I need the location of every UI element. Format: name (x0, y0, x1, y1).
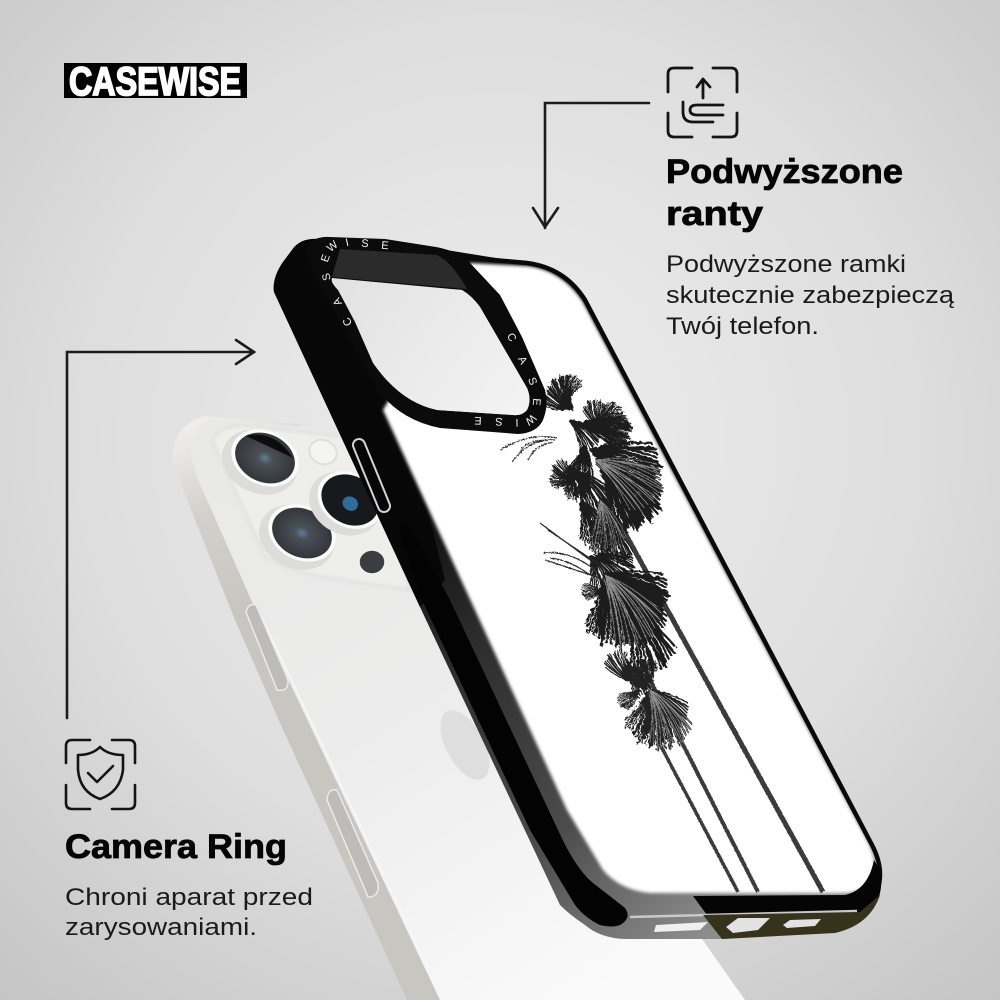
ring lettering right: W (522, 411, 538, 428)
side slot (398, 524, 628, 926)
lens bottom (248, 491, 346, 582)
ring lettering right: E (530, 398, 542, 406)
phone back (190, 418, 745, 1000)
flash (305, 435, 341, 469)
white phone (172, 416, 745, 1000)
bottom light line (630, 911, 857, 917)
camera ring (307, 237, 547, 434)
ring lettering left: I (344, 237, 350, 249)
camera plateau (212, 425, 410, 590)
usb hole (726, 918, 770, 933)
trunks (615, 515, 823, 892)
ring hole (332, 278, 530, 415)
ring lettering left: A (331, 295, 345, 308)
fine fronds two (540, 523, 600, 578)
phone side band (172, 416, 470, 1000)
palm trees (500, 370, 823, 892)
apple logo (430, 703, 500, 787)
ring lettering left: S (320, 272, 334, 282)
side button (327, 790, 378, 897)
icon: raised edges (668, 68, 737, 137)
bottom olive edge (703, 895, 880, 939)
upper side button (246, 605, 288, 690)
sensor (359, 550, 385, 574)
heading: raised edges: ranty (666, 195, 763, 233)
mic hole (783, 919, 821, 928)
ring lettering right: A (515, 354, 529, 367)
ring inner wall (332, 249, 467, 289)
fine fronds one (500, 436, 557, 462)
heading: raised edges: Podwyższone (666, 153, 903, 191)
ring lettering left: W (325, 238, 341, 255)
volume button (359, 445, 384, 506)
black phone case (274, 239, 881, 939)
ring lettering left: E (319, 253, 333, 264)
ring lettering right: E (474, 414, 482, 426)
bottom black strip (693, 860, 881, 915)
heading: camera ring: Camera Ring (65, 828, 287, 866)
crown two (576, 543, 682, 684)
text: raised edges description: Twój telefon. (666, 313, 819, 340)
icon: shield (66, 740, 135, 809)
ring lettering right: C (504, 331, 518, 344)
logo: CASEWISE (69, 59, 241, 104)
arrow: raised edges (533, 103, 649, 228)
crown one (538, 370, 674, 571)
right rim (460, 257, 880, 888)
case upper solid (274, 239, 480, 607)
ring lettering left: E (381, 240, 389, 252)
ring lettering right: I (515, 416, 519, 428)
ring lettering right: S (495, 415, 503, 427)
lens right (297, 457, 393, 548)
palm highlights (578, 440, 698, 758)
speaker hole (654, 922, 708, 932)
ring frame (307, 237, 547, 434)
ring lettering left: C (341, 315, 355, 328)
screen (383, 263, 875, 893)
crown three (600, 644, 698, 758)
ring lettering right (474, 331, 542, 428)
text: raised edges description: Podwyższone ramki (666, 251, 906, 278)
arrow: camera ring (67, 340, 254, 718)
case body (274, 239, 880, 939)
text: camera ring description: zarysowaniami. (65, 914, 257, 941)
ring lettering left: S (361, 238, 369, 250)
ring lettering right: S (525, 376, 539, 387)
lens top (211, 416, 309, 507)
text: raised edges description: skutecznie zabezpieczą (666, 282, 955, 309)
ring lettering left (319, 237, 389, 328)
text: camera ring description: Chroni aparat przed (65, 884, 313, 911)
